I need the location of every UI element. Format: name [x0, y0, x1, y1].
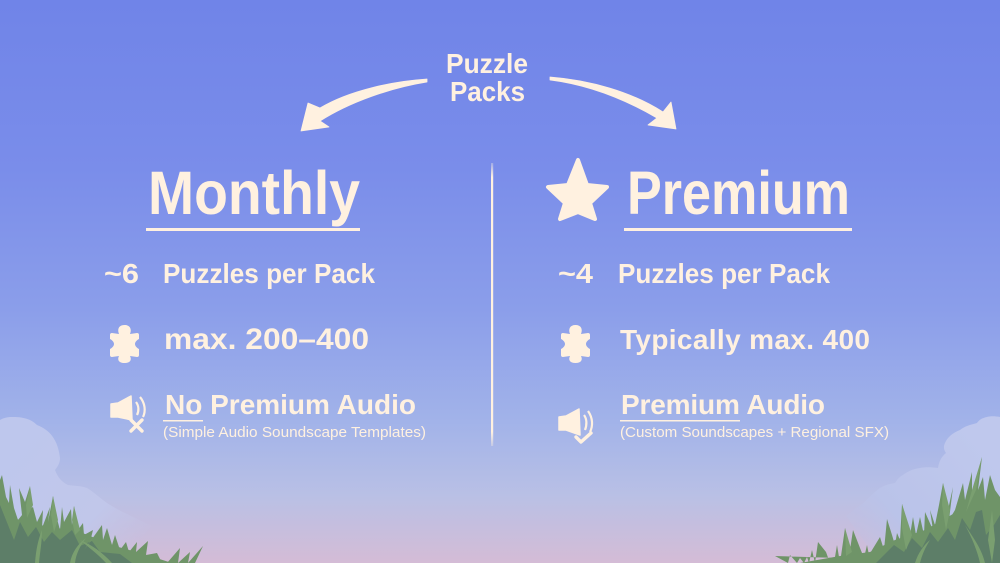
- row: puzzles per pack: Puzzles per Pack: [618, 258, 830, 289]
- row: puzzles per pack: ~6: [104, 258, 139, 289]
- heading: Puzzle Packs: Packs: [450, 76, 525, 107]
- icon: puzzle piece: [561, 325, 590, 363]
- panel: Premium: [548, 159, 889, 442]
- cloud: left: [0, 417, 152, 563]
- icon: speaker with check: [559, 409, 592, 442]
- icon: speaker muted: [111, 396, 145, 431]
- row: no premium audio: [163, 389, 426, 441]
- piece count: Typically max. 400: [620, 324, 870, 355]
- icon: puzzle piece: [110, 325, 139, 363]
- row: puzzles per pack: Puzzles per Pack: [163, 258, 375, 289]
- heading: Monthly: Monthly: [148, 159, 360, 227]
- heading: Puzzle Packs: Puzzle: [446, 48, 528, 79]
- cloud: right: [846, 416, 1000, 563]
- row: puzzles per pack: ~4: [558, 258, 593, 289]
- panel: Monthly: [104, 159, 426, 441]
- heading underline: [146, 228, 360, 231]
- grass: left: [0, 475, 203, 563]
- grass: right: [775, 457, 1000, 563]
- row: premium audio: (Custom Soundscapes + Regional SFX): [620, 424, 889, 441]
- arrow: to Premium: [550, 77, 676, 129]
- divider: [491, 163, 493, 446]
- row: premium audio: [620, 389, 889, 441]
- row: no premium audio: (Simple Audio Soundscape Templates): [163, 424, 426, 441]
- heading underline: [624, 228, 852, 231]
- row: no premium audio: No Premium Audio: [165, 389, 416, 420]
- row: premium audio: Premium Audio: [621, 389, 825, 420]
- heading: Puzzle Packs: [446, 48, 528, 107]
- icon: star: [548, 160, 607, 219]
- arrow: to Monthly: [301, 79, 427, 131]
- piece count: max. 200–400: [164, 323, 369, 356]
- heading: Premium: Premium: [627, 159, 850, 227]
